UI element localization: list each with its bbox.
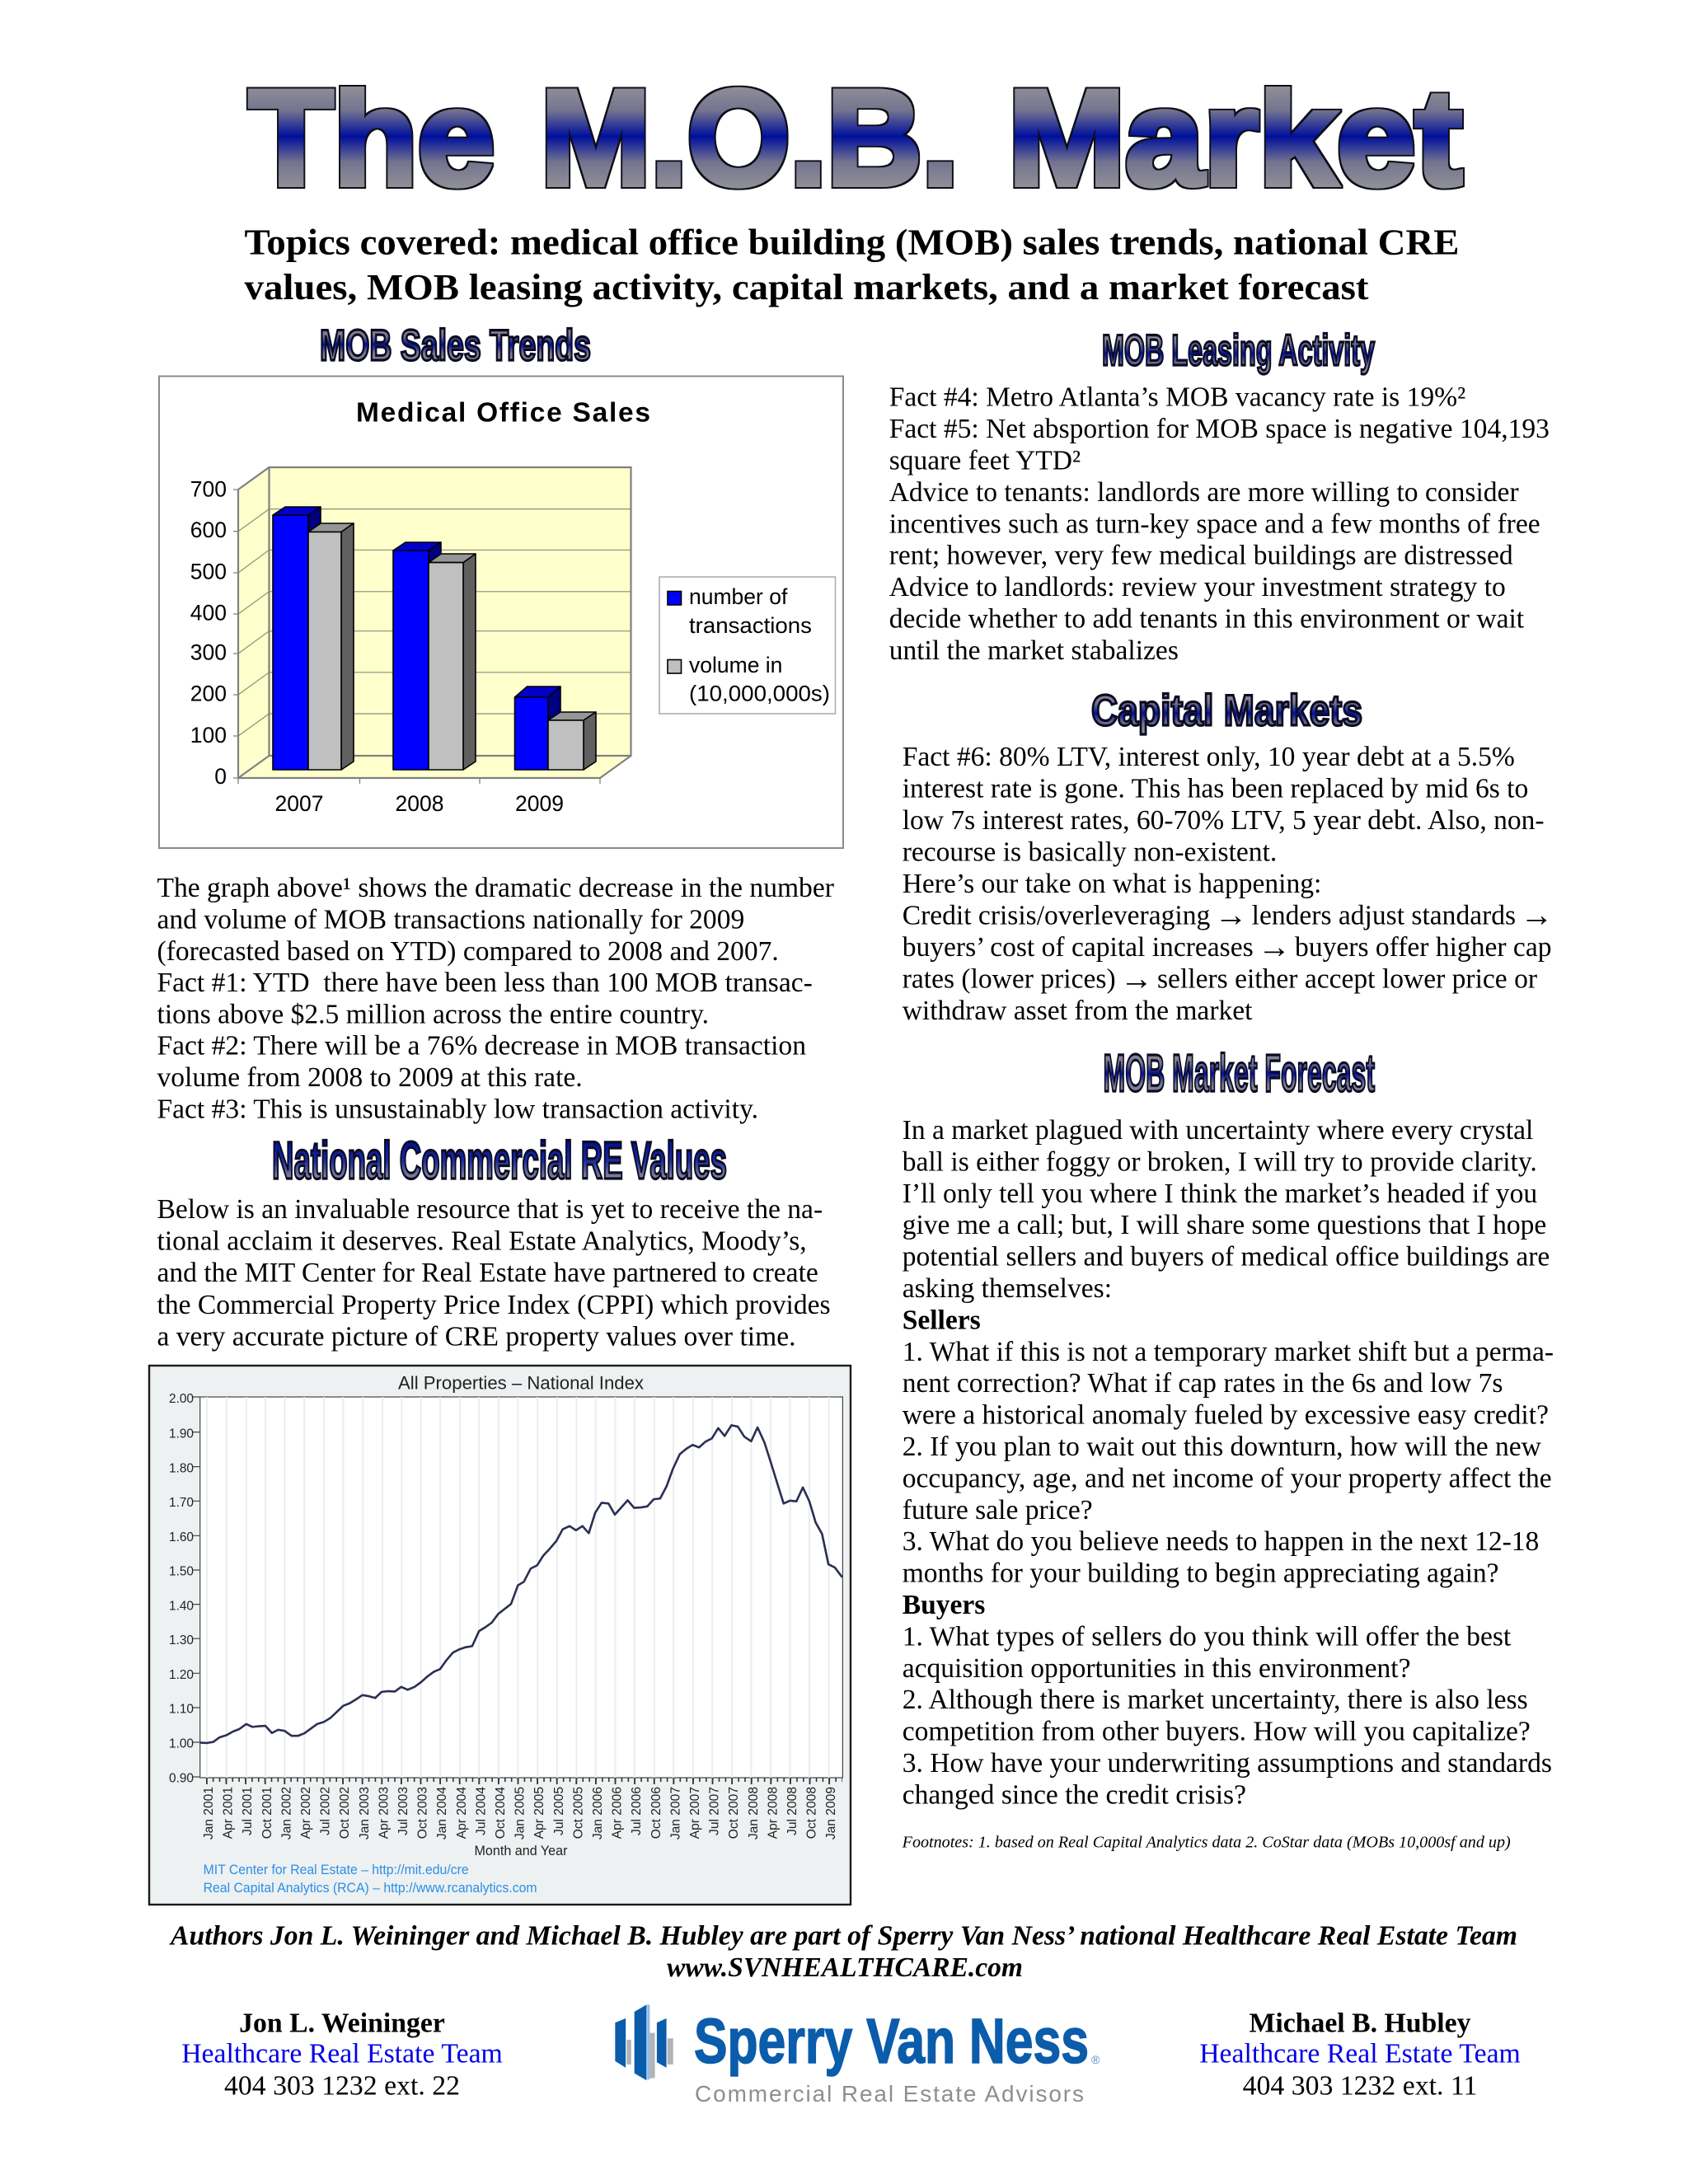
panel: national index line chart: [149, 1366, 851, 1905]
heading: National Commercial RE Values: National Commercial RE Values: [272, 1131, 727, 1190]
grid lines and axes ticks: [193, 1397, 842, 1781]
y axis labels: 400: [190, 601, 227, 626]
text block: capital markets: [903, 742, 1554, 1026]
text block: market forecast: changed since the credit crisis?: [903, 1779, 1246, 1810]
text block: capital markets: withdraw asset from the market: [903, 996, 1253, 1026]
text block: CPPI intro: [157, 1194, 831, 1352]
x axis month labels: [202, 1787, 838, 1840]
text block: market forecast: potential sellers and buyers of medical office buildings are: [903, 1242, 1550, 1272]
text block: CPPI intro: the Commercial Property Price Index (CPPI) which provides: [157, 1290, 831, 1320]
text block: capital markets: →: [1215, 897, 1248, 933]
text block: graph commentary and facts 1-3: Fact #3: This is unsustainably low transaction activity.: [157, 1094, 758, 1124]
contact: Michael B. Hubley: 404 303 1232 ext. 11: [1243, 2070, 1477, 2102]
x axis month labels: Apr 2004: [455, 1787, 469, 1839]
text block: market forecast: Buyers: [903, 1590, 985, 1620]
title: M.O.B.: [541, 62, 959, 213]
y axis labels: 1.70: [169, 1496, 194, 1510]
x axis month labels: Jul 2005: [552, 1787, 566, 1835]
text block: market forecast: ball is either foggy or broken, I will try to provide clarity.: [903, 1146, 1537, 1177]
legend: volume in: [689, 653, 782, 677]
text block: market forecast: I’ll only tell you where I think the market’s headed if you: [903, 1179, 1537, 1209]
text block: CPPI intro: tional acclaim it deserves. Real Estate Analytics, Moody’s,: [157, 1226, 807, 1256]
panel: medical office sales chart: [159, 376, 843, 848]
y axis labels: [169, 1392, 194, 1786]
title: The: [249, 62, 495, 213]
text block: market forecast: were a historical anomaly fueled by excessive easy credit?: [903, 1400, 1549, 1431]
text block: capital markets: →: [1521, 897, 1554, 933]
text block: leasing facts and advice: [889, 382, 1550, 666]
text block: graph commentary and facts 1-3: The graph above¹ shows the dramatic decrease in the number: [157, 873, 834, 903]
text block: capital markets: rates (lower prices): [903, 964, 1116, 994]
y axis labels: 1.10: [169, 1703, 194, 1717]
text block: market forecast: Sellers: [903, 1305, 981, 1335]
y axis labels: [190, 477, 227, 789]
text block: market forecast: asking themselves:: [903, 1273, 1112, 1304]
heading: MOB Sales Trends: MOB Sales Trends: [320, 321, 591, 370]
x axis month labels: Oct 2003: [416, 1787, 430, 1839]
contact: Michael B. Hubley: Healthcare Real Estate Team: [1199, 2039, 1521, 2069]
text block: capital markets: →: [1120, 959, 1153, 997]
y axis labels: 700: [190, 477, 227, 502]
y axis labels: 1.90: [169, 1427, 194, 1441]
icon: building bars: [615, 2004, 673, 2080]
y axis labels: 1.40: [169, 1599, 194, 1613]
x axis month labels: Apr 2006: [611, 1787, 625, 1839]
heading: MOB Leasing Activity: MOB Leasing Activity: [1102, 326, 1375, 375]
y axis labels: 0: [214, 764, 227, 789]
text block: market forecast: occupancy, age, and net income of your property affect the: [903, 1463, 1552, 1493]
x axis labels: 2008: [396, 791, 443, 816]
y axis labels: 200: [190, 682, 227, 706]
x axis month labels: Jan 2003: [358, 1787, 372, 1840]
text block: graph commentary and facts 1-3: volume from 2008 to 2009 at this rate.: [157, 1062, 583, 1093]
chart walls and floor: [233, 467, 631, 784]
x axis labels: [275, 791, 564, 816]
contact: Jon L. Weininger: Jon L. Weininger: [239, 2008, 445, 2039]
text block: leasing facts and advice: incentives such as turn-key space and a few months of free: [889, 509, 1540, 539]
heading: Capital Markets: Capital Markets: [1091, 687, 1362, 735]
text block: capital markets: sellers either accept lower price or: [1151, 964, 1537, 994]
text block: capital markets: recourse is basically non-existent.: [903, 837, 1277, 867]
x axis month labels: Jan 2007: [668, 1787, 682, 1840]
text block: capital markets: Fact #6: 80% LTV, interest only, 10 year debt at a 5.5%: [903, 742, 1515, 772]
x axis month labels: Jan 2004: [435, 1787, 449, 1840]
subtitle: topics covered: values, MOB leasing activity, capital markets, and a market forecast: [244, 266, 1369, 307]
chart title: Medical Office Sales: [356, 397, 650, 429]
text block: capital markets: low 7s interest rates, 60-70% LTV, 5 year debt. Also, non-: [903, 805, 1545, 836]
logo: Sperry Van Ness: Commercial Real Estate Advisors: [695, 2081, 1084, 2107]
legend: number of: [689, 584, 788, 609]
text block: market forecast: 3. What do you believe needs to happen in the next 12-18: [903, 1526, 1539, 1557]
source credits: [204, 1863, 537, 1896]
source credits: MIT Center for Real Estate – http://mit.edu/cre: [204, 1863, 469, 1877]
x axis title: Month and Year: [475, 1843, 568, 1858]
x axis month labels: Apr 2007: [688, 1787, 702, 1839]
source credits: Real Capital Analytics (RCA) – http://www.rcanalytics.com: [204, 1881, 537, 1896]
x axis month labels: Jul 2008: [785, 1787, 799, 1835]
y axis labels: 100: [190, 723, 227, 748]
x axis month labels: Jan 2009: [824, 1787, 838, 1840]
text block: market forecast: [903, 1115, 1554, 1810]
x axis month labels: Jul 2003: [396, 1787, 410, 1835]
bars 2009: [514, 687, 596, 770]
text block: market forecast: future sale price?: [903, 1495, 1093, 1526]
x axis month labels: Apr 2002: [299, 1787, 313, 1839]
contact: Jon L. Weininger: Healthcare Real Estate Team: [181, 2039, 503, 2069]
legend: transactions: [689, 613, 812, 638]
y axis labels: 500: [190, 559, 227, 583]
text block: market forecast: 2. If you plan to wait out this downturn, how will the new: [903, 1432, 1542, 1462]
y axis labels: 2.00: [169, 1392, 194, 1406]
y axis labels: 1.00: [169, 1737, 194, 1751]
text block: CPPI intro: and the MIT Center for Real Estate have partnered to create: [157, 1258, 818, 1288]
x axis month labels: Jan 2008: [747, 1787, 761, 1840]
legend: [659, 577, 836, 714]
text block: leasing facts and advice: Fact #5: Net absportion for MOB space is negative 104,193: [889, 414, 1550, 444]
text block: CPPI intro: a very accurate picture of CRE property values over time.: [157, 1322, 796, 1352]
x axis labels: 2009: [515, 791, 564, 816]
authors statement: Authors Jon L. Weininger and Michael B. Hubley are part of Sperry Van Ness’ national Healthcare Real Estate Team: [169, 1920, 1517, 1952]
text block: leasing facts and advice: Advice to landlords: review your investment strategy to: [889, 572, 1506, 602]
text block: market forecast: competition from other buyers. How will you capitalize?: [903, 1717, 1531, 1747]
text block: capital markets: Here’s our take on what is happening:: [903, 869, 1321, 899]
legend: (10,000,000s): [689, 682, 830, 706]
text block: market forecast: 1. What if this is not a temporary market shift but a perma-: [903, 1337, 1554, 1367]
title: [246, 85, 1465, 190]
text block: graph commentary and facts 1-3: and volume of MOB transactions nationally for 2009: [157, 904, 744, 935]
x axis labels: 2007: [275, 791, 323, 816]
text block: capital markets: buyers’ cost of capital increases: [903, 932, 1254, 963]
text block: CPPI intro: Below is an invaluable resource that is yet to receive the na-: [157, 1194, 823, 1225]
x axis month labels: Jul 2006: [630, 1787, 644, 1835]
y axis labels: 1.20: [169, 1668, 194, 1682]
text block: market forecast: 2. Although there is market uncertainty, there is also less: [903, 1685, 1528, 1715]
authors statement: www.SVNHEALTHCARE.com: [667, 1952, 1023, 1983]
x axis month labels: Jan 2002: [279, 1787, 293, 1840]
logo: Sperry Van Ness: [615, 2004, 1100, 2107]
y axis labels: 300: [190, 640, 227, 664]
x axis month labels: Oct 2007: [727, 1787, 741, 1839]
x axis month labels: Jul 2001: [241, 1787, 255, 1835]
x axis month labels: Oct 2005: [571, 1787, 585, 1839]
subtitle: topics covered: Topics covered: medical office building (MOB) sales trends, national CRE: [244, 221, 1460, 262]
text block: capital markets: →: [1258, 928, 1291, 965]
x axis month labels: Jan 2005: [513, 1787, 528, 1840]
authors statement: [169, 1920, 1517, 1983]
x axis month labels: Oct 2001: [260, 1787, 274, 1839]
text block: graph commentary and facts 1-3: [157, 873, 834, 1124]
x axis month labels: Oct 2008: [805, 1787, 819, 1839]
chart title: All Properties – National Index: [398, 1373, 644, 1393]
subtitle: topics covered: [244, 221, 1460, 307]
x axis month labels: Oct 2004: [494, 1787, 508, 1839]
text block: market forecast: nent correction? What if cap rates in the 6s and low 7s: [903, 1368, 1503, 1399]
x axis month labels: Jan 2001: [202, 1787, 216, 1840]
text block: leasing facts and advice: square feet YTD²: [889, 445, 1081, 476]
text block: capital markets: interest rate is gone. This has been replaced by mid 6s to: [903, 773, 1528, 804]
x axis month labels: Apr 2005: [532, 1787, 546, 1839]
text block: market forecast: 3. How have your underwriting assumptions and standards: [903, 1748, 1552, 1779]
x axis month labels: Oct 2002: [338, 1787, 352, 1839]
x axis month labels: Apr 2008: [766, 1787, 780, 1839]
plot area: [200, 1397, 842, 1778]
x axis month labels: Oct 2006: [649, 1787, 663, 1839]
contact: Michael B. Hubley: [1199, 2008, 1521, 2102]
contact: Michael B. Hubley: Michael B. Hubley: [1249, 2008, 1471, 2039]
x axis month labels: Apr 2001: [222, 1787, 236, 1839]
y axis labels: 1.30: [169, 1633, 194, 1647]
bars 2008: [393, 542, 476, 770]
text block: graph commentary and facts 1-3: tions above $2.5 million across the entire country.: [157, 999, 709, 1029]
index line: [200, 1425, 842, 1743]
text block: market forecast: months for your building to begin appreciating again?: [903, 1558, 1499, 1589]
logo: Sperry Van Ness: Sperry Van Ness: [694, 2006, 1089, 2077]
title: Market: [1008, 62, 1462, 213]
text block: leasing facts and advice: until the market stabalizes: [889, 635, 1179, 666]
contact: Jon L. Weininger: 404 303 1232 ext. 22: [224, 2070, 460, 2102]
text block: leasing facts and advice: Advice to tenants: landlords are more willing to consider: [889, 477, 1519, 508]
text block: leasing facts and advice: Fact #4: Metro Atlanta’s MOB vacancy rate is 19%²: [889, 382, 1465, 413]
text block: leasing facts and advice: rent; however, very few medical buildings are distressed: [889, 541, 1513, 571]
footnotes: Footnotes: 1. based on Real Capital Analytics data 2. CoStar data (MOBs 10,000sf and up): [902, 1834, 1511, 1852]
heading: MOB Market Forecast: MOB Market Forecast: [1103, 1043, 1375, 1103]
y axis labels: 1.80: [169, 1461, 194, 1475]
text block: market forecast: give me a call; but, I will share some questions that I hope: [903, 1210, 1546, 1240]
x axis month labels: Apr 2003: [377, 1787, 391, 1839]
x axis month labels: Jul 2004: [474, 1787, 488, 1835]
text block: graph commentary and facts 1-3: Fact #2: There will be a 76% decrease in MOB transaction: [157, 1031, 806, 1062]
bars 2007: [273, 507, 354, 770]
contact: Jon L. Weininger: [181, 2008, 503, 2102]
logo: Sperry Van Ness: ®: [1091, 2053, 1100, 2066]
y axis labels: 0.90: [169, 1772, 194, 1786]
text block: capital markets: lenders adjust standards: [1245, 900, 1523, 931]
text block: market forecast: acquisition opportunities in this environment?: [903, 1653, 1411, 1684]
text block: graph commentary and facts 1-3: Fact #1: YTD there have been less than 100 MOB transac-: [157, 968, 813, 998]
text block: leasing facts and advice: decide whether to add tenants in this environment or wait: [889, 603, 1525, 635]
y axis labels: 1.50: [169, 1565, 194, 1579]
x axis month labels: Jan 2006: [591, 1787, 605, 1840]
x axis month labels: Jul 2007: [708, 1787, 722, 1835]
text block: market forecast: In a market plagued with uncertainty where every crystal: [903, 1115, 1533, 1146]
x axis month labels: Jul 2002: [319, 1787, 333, 1835]
y axis labels: 600: [190, 518, 227, 542]
text block: graph commentary and facts 1-3: (forecasted based on YTD) compared to 2008 and 2007.: [157, 936, 779, 967]
text block: market forecast: 1. What types of sellers do you think will offer the best: [903, 1621, 1512, 1652]
text block: capital markets: buyers offer higher cap: [1288, 932, 1551, 963]
y axis labels: 1.60: [169, 1530, 194, 1544]
text block: capital markets: Credit crisis/overleveraging: [903, 900, 1210, 931]
